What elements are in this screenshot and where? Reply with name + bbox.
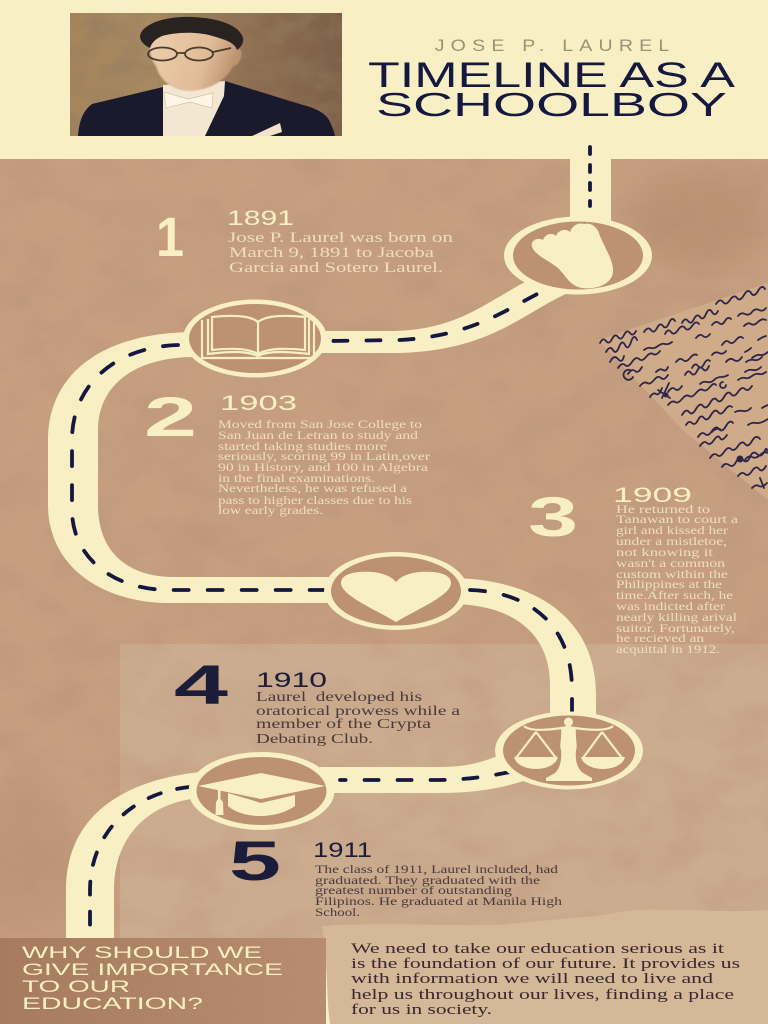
description: San Juan de Letran to study and <box>218 430 418 442</box>
road: step 5 downward <box>66 772 200 940</box>
description <box>616 504 738 656</box>
closing paragraph <box>351 941 740 1018</box>
year 1911: 1911 <box>313 839 372 862</box>
description <box>218 419 430 517</box>
description: He returned to <box>616 504 710 516</box>
description: time.After such, he <box>616 590 733 602</box>
textured paper background <box>0 159 768 939</box>
description: graduated. They graduated with the <box>315 873 540 887</box>
description: Tanawan to court a <box>616 514 738 526</box>
description <box>256 690 461 747</box>
portrait photo <box>70 13 342 136</box>
description: nearly killing arival <box>616 612 737 624</box>
description: March 9, 1891 to Jacoba <box>229 245 435 261</box>
face <box>150 26 241 91</box>
number 4: 4 <box>174 653 228 716</box>
glasses <box>148 48 231 60</box>
closing paragraph: help us throughout our lives, finding a place <box>351 987 734 1003</box>
number 5: 5 <box>229 829 281 892</box>
description: wasn't a common <box>616 558 725 570</box>
description: 90 in History, and 100 in Algebra <box>218 462 428 474</box>
step 1 marker: footprint <box>504 216 652 294</box>
description: Debating Club. <box>256 732 373 747</box>
number 1: 1 <box>156 205 184 268</box>
road: step 4 to step 5 <box>320 745 540 793</box>
description: Filipinos. He graduated at Manila High <box>315 894 562 908</box>
panel: question box <box>0 938 326 1024</box>
closing paragraph: for us in society. <box>351 1002 492 1018</box>
description: not knowing it <box>616 547 714 559</box>
road: step 3 to step 4 <box>450 578 596 730</box>
question heading: GIVE IMPORTANCE <box>22 960 283 979</box>
description: Moved from San Jose College to <box>218 419 422 431</box>
description: pass to higher classes due to his <box>218 495 413 507</box>
closing paragraph: with information we will need to live and <box>351 971 714 987</box>
description: was indicted after <box>616 601 725 613</box>
year 1910: 1910 <box>256 669 327 692</box>
description <box>228 230 454 276</box>
description: School. <box>315 905 360 919</box>
heading: JOSE P. LAUREL: JOSE P. LAUREL <box>435 35 669 55</box>
step 3 text <box>528 484 738 656</box>
description: The class of 1911, Laurel included, had <box>315 862 558 876</box>
description: Laurel developed his <box>256 690 422 705</box>
mouth shadow <box>168 72 200 74</box>
bow tie <box>164 92 213 108</box>
description: seriously, scoring 99 in Latin,over <box>218 451 430 463</box>
description: Philippines at the <box>616 579 722 591</box>
title: TIMELINE AS A <box>368 55 735 95</box>
description: custom within the <box>616 569 728 581</box>
icon: foot <box>532 223 613 288</box>
description: girl and kissed her <box>616 525 728 537</box>
step 2 text <box>144 385 430 517</box>
title: SCHOOLBOY <box>376 86 727 123</box>
description: Jose P. Laurel was born on <box>228 230 454 246</box>
step 1 text <box>156 205 454 276</box>
step 2 marker: open book <box>183 300 327 378</box>
year 1903: 1903 <box>220 392 297 415</box>
icon: scales <box>514 718 625 781</box>
question heading <box>22 943 283 1013</box>
hair <box>140 17 243 50</box>
question heading: WHY SHOULD WE <box>22 943 262 962</box>
description: greatest number of outstanding <box>315 883 512 897</box>
description: suitor. Fortunately, <box>616 623 735 635</box>
step 4 text <box>174 653 461 747</box>
title <box>368 55 735 123</box>
icon: heart <box>341 572 451 622</box>
number 2: 2 <box>144 385 197 448</box>
description: Nevertheless, he was refused a <box>218 483 407 495</box>
icon: cap <box>198 773 325 816</box>
step 3 marker: heart <box>324 552 468 630</box>
description: acquittal in 1912. <box>616 644 720 656</box>
description: under a mistletoe, <box>616 536 727 548</box>
description <box>315 862 562 919</box>
note paper with handwriting <box>598 283 768 500</box>
description: in the final examinations. <box>218 473 375 485</box>
closing paragraph: We need to take our education serious as it <box>351 941 725 957</box>
road dashes <box>72 147 590 938</box>
icon: book <box>202 316 314 358</box>
year 1891: 1891 <box>227 207 294 230</box>
number 3: 3 <box>528 485 578 548</box>
description: Garcia and Sotero Laurel. <box>229 260 443 276</box>
header band <box>0 0 768 159</box>
panel: torn paper <box>322 910 768 1024</box>
description: member of the Crypta <box>256 717 432 732</box>
road: step 2 to step 3 <box>48 332 340 603</box>
step 4 marker: scales <box>495 712 643 790</box>
description: started taking studies more <box>218 441 387 453</box>
description: he recieved an <box>616 633 704 645</box>
closing paragraph: is the foundation of our future. It provides us <box>351 956 740 972</box>
year 1909: 1909 <box>613 484 692 507</box>
description: low early grades. <box>218 505 323 517</box>
road: step 1 to step 2 <box>320 272 575 353</box>
question heading: TO OUR <box>22 977 130 996</box>
question heading: EDUCATION? <box>22 994 203 1013</box>
shirt <box>163 81 225 136</box>
jacket <box>78 81 335 136</box>
road: top connector <box>570 159 611 229</box>
description: oratorical prowess while a <box>256 704 461 719</box>
step 5 text <box>229 829 562 919</box>
step 5 marker: graduation cap <box>188 752 334 830</box>
pocket square <box>252 123 282 136</box>
